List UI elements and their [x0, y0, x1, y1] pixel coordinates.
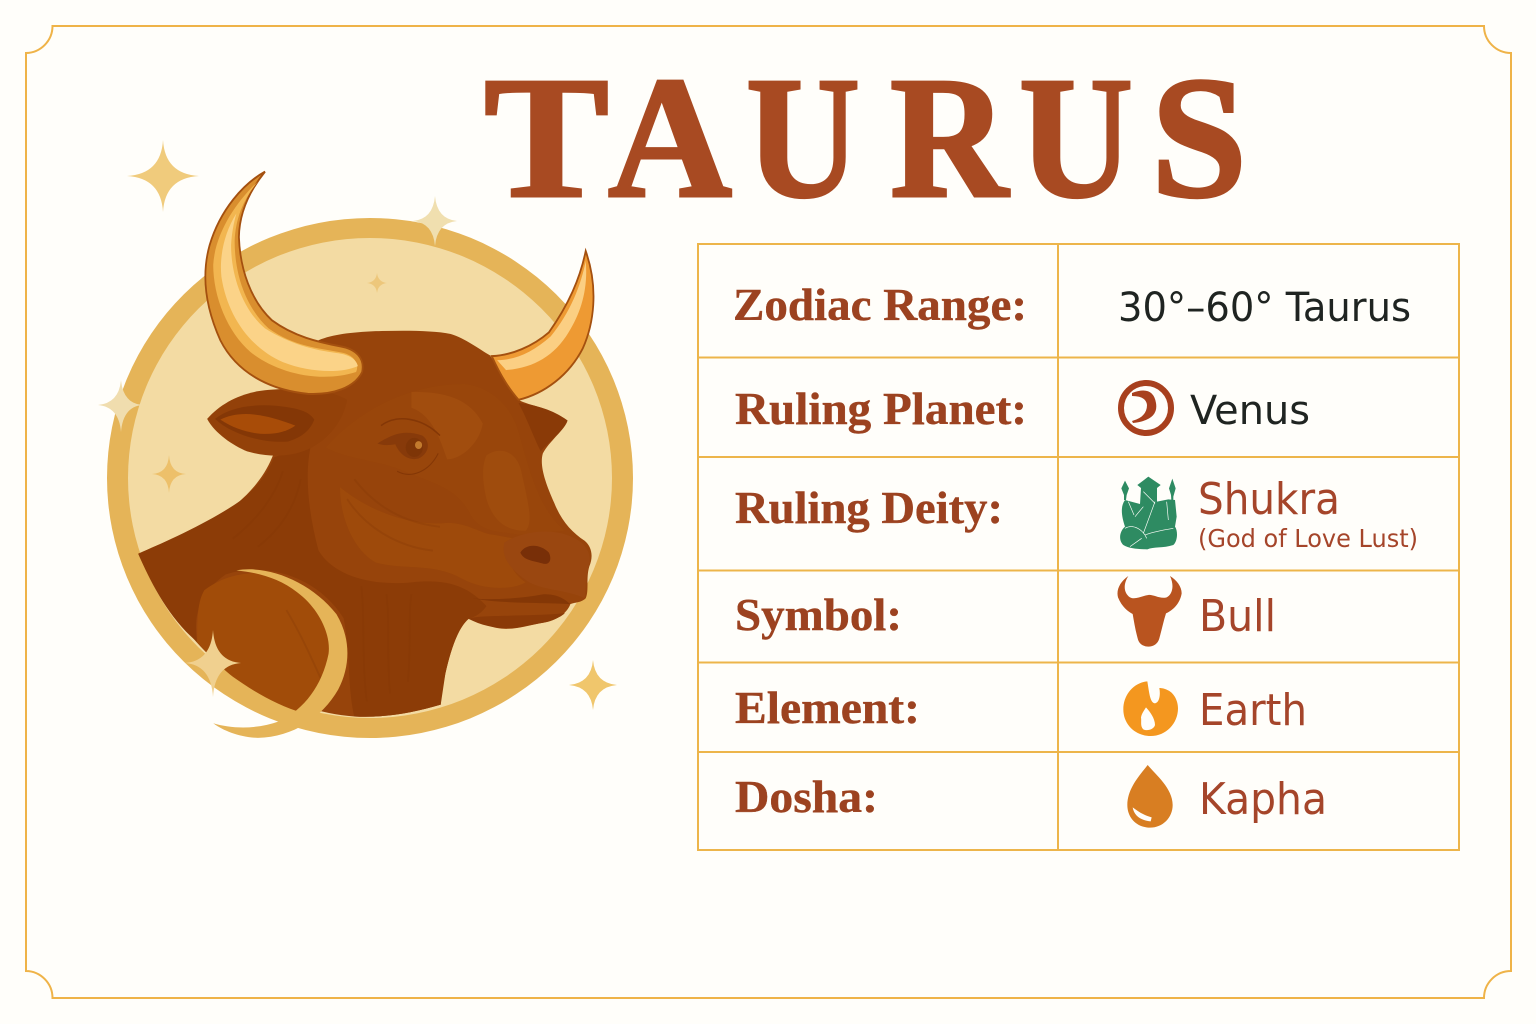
near ear: [207, 389, 347, 456]
row: element: Earth: [1199, 685, 1307, 736]
title: T: [484, 41, 609, 234]
sparkle stars: [98, 140, 617, 710]
row: symbol: Bull: [1199, 591, 1276, 642]
row: zodiac range: Zodiac Range:: [733, 280, 1027, 330]
row: zodiac range: 30°–60° Taurus: [1118, 285, 1411, 331]
icon: earth flame: [1123, 681, 1178, 736]
icon: bull head: [1117, 576, 1182, 647]
shoulder highlight: [197, 573, 340, 713]
row: ruling deity: Shukra: [1198, 474, 1340, 525]
bull figure: [138, 172, 594, 738]
icon: deity figure: [1120, 477, 1177, 549]
right horn: [492, 251, 594, 400]
row: zodiac range: [733, 280, 1411, 331]
title: U: [746, 41, 860, 234]
row: symbol: [735, 576, 1276, 647]
medallion circle: [107, 218, 633, 738]
row: element: [735, 681, 1307, 736]
face highlights: [326, 384, 565, 535]
row: ruling deity: [735, 474, 1418, 553]
row: dosha: [735, 765, 1327, 828]
crescent moon: [213, 569, 347, 738]
row: ruling planet: [735, 383, 1310, 434]
bull medallion illustration: [98, 140, 633, 738]
icon: kapha drop: [1127, 765, 1173, 828]
title: U: [1019, 41, 1133, 234]
row: symbol: Symbol:: [735, 590, 902, 640]
table grid: [698, 244, 1459, 850]
eye: [377, 419, 440, 474]
attribute table: [698, 244, 1459, 850]
title: [484, 41, 1247, 234]
row: ruling deity: (God of Love Lust): [1198, 524, 1418, 553]
left horn: [205, 172, 363, 394]
title: A: [608, 41, 732, 234]
title: S: [1151, 41, 1247, 234]
row: ruling planet: Venus: [1190, 388, 1310, 434]
bull head and body: [138, 331, 592, 717]
row: dosha: Kapha: [1199, 774, 1327, 825]
title: R: [890, 41, 1010, 234]
row: ruling planet: Ruling Planet:: [735, 384, 1027, 434]
icon: venus crescent: [1121, 383, 1171, 433]
dark shading: [138, 443, 486, 717]
fur strokes: [233, 471, 440, 701]
row: element: Element:: [735, 683, 920, 733]
far ear: [519, 403, 567, 451]
nostril and mouth: [469, 546, 570, 628]
row: ruling deity: Ruling Deity:: [735, 483, 1003, 533]
row: dosha: Dosha:: [735, 772, 878, 822]
